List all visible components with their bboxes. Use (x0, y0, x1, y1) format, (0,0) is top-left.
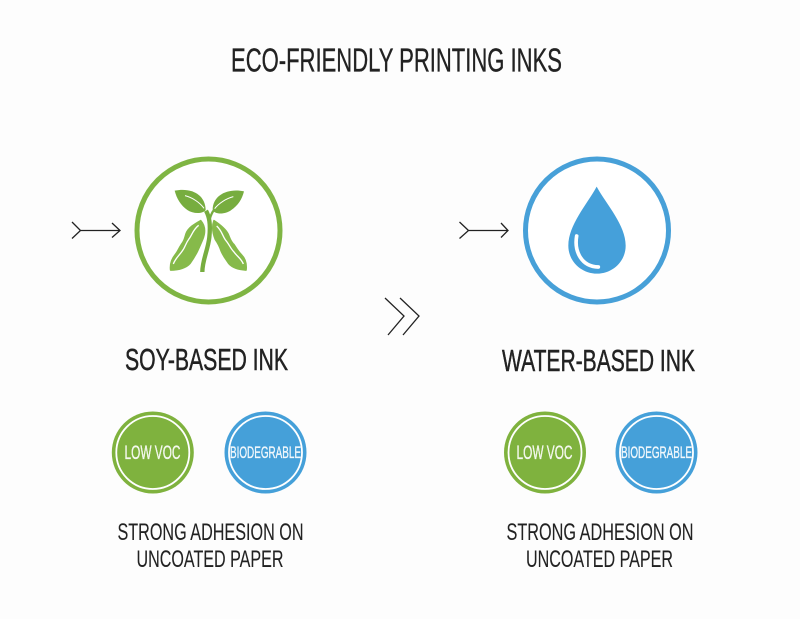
text: adhesion note: UNCOATED PAPER (136, 546, 284, 573)
title: ECO-FRIENDLY PRINTING INKS (231, 42, 562, 78)
badge: low VOC: LOW VOC (516, 443, 572, 464)
arrow: double chevron (385, 298, 419, 335)
panel: soy-based ink (72, 159, 310, 573)
badge: low VOC: LOW VOC (124, 443, 180, 464)
panel: water-based ink (460, 159, 700, 573)
arrow: soy input (72, 222, 120, 238)
badge: biodegradable: BIODEGRABLE (230, 443, 301, 462)
icon: water drop in circle (526, 159, 668, 302)
text: adhesion note: UNCOATED PAPER (526, 546, 673, 573)
heading: water-based ink: WATER-BASED INK (502, 343, 695, 378)
badge: biodegradable (224, 412, 306, 494)
badge: biodegradable (616, 412, 698, 494)
arrow: water input (460, 222, 508, 238)
badge: low VOC (504, 412, 586, 494)
icon: soy plant in circle (137, 159, 280, 302)
text: adhesion note: STRONG ADHESION ON (506, 519, 694, 546)
text: adhesion note: STRONG ADHESION ON (118, 519, 304, 546)
badge: low VOC (112, 412, 194, 494)
badge: biodegradable: BIODEGRABLE (621, 443, 692, 462)
heading: soy-based ink: SOY-BASED INK (125, 342, 288, 377)
